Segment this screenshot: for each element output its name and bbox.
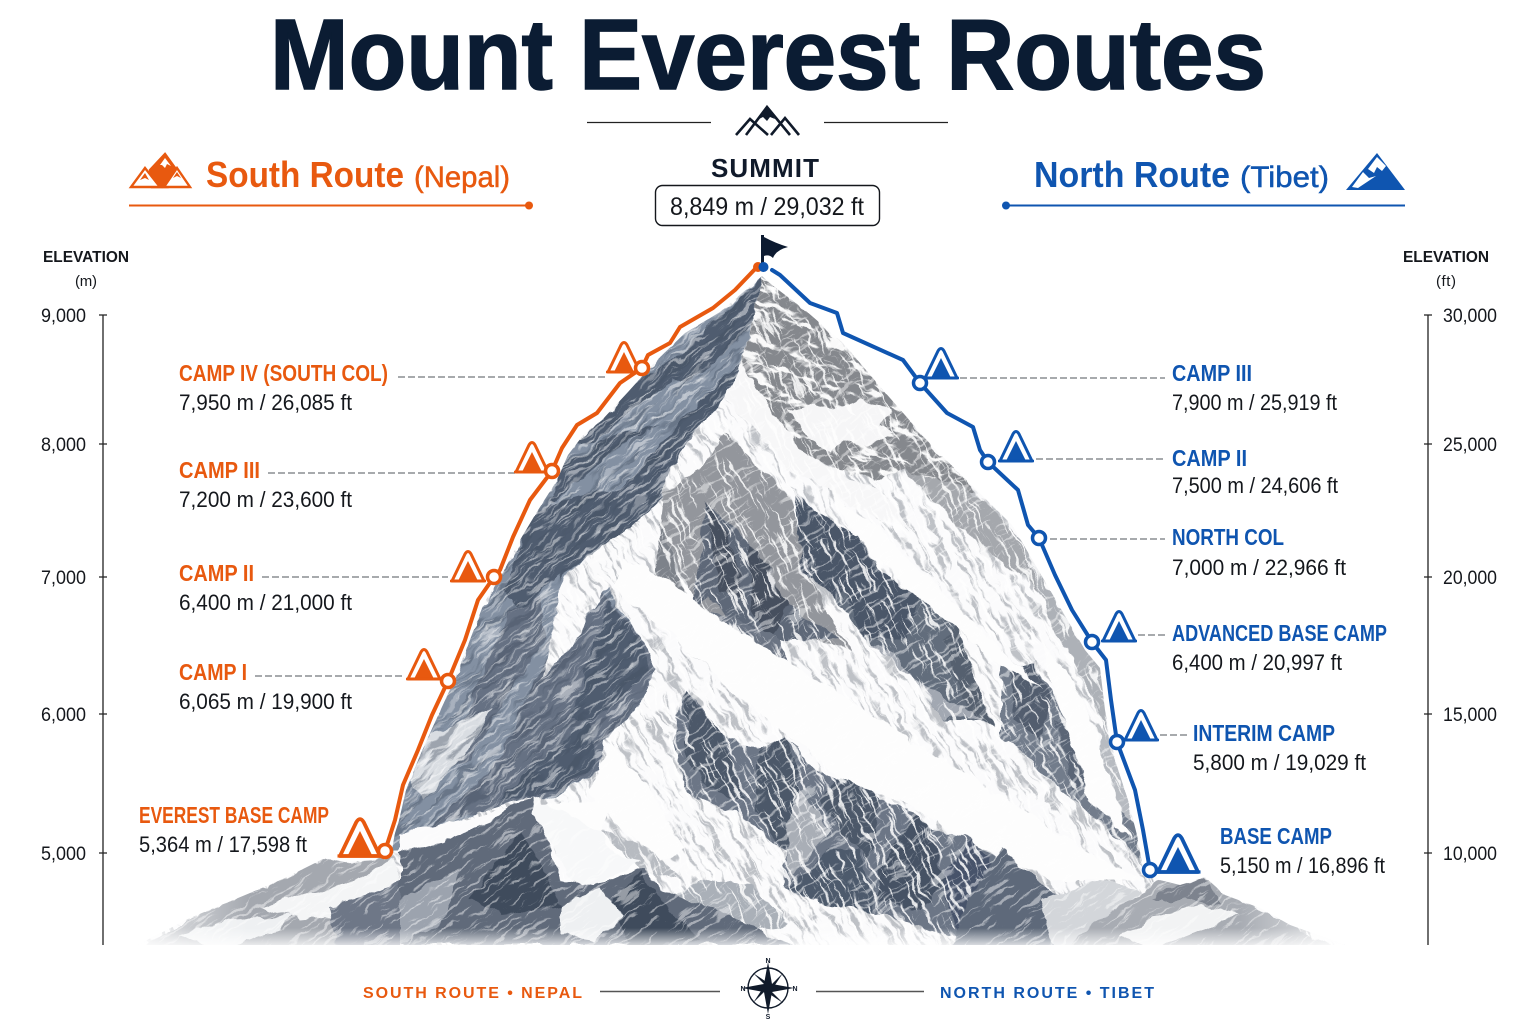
north route region: (Tibet): [1240, 161, 1329, 194]
north camp: camp II: [982, 432, 1338, 498]
south camp: camp IV: [179, 342, 648, 415]
left axis title: ELEVATION: [43, 249, 129, 266]
right elevation axis: 25,000: [1443, 435, 1497, 456]
south camp: camp III: 7,200 m / 23,600 ft: [179, 487, 352, 512]
icon: south route mountains: [131, 154, 190, 187]
upper right face: [724, 277, 1038, 592]
south camp: camp I: 6,065 m / 19,900 ft: [179, 689, 352, 714]
rock cluster B: [1001, 663, 1139, 860]
left elevation axis: 7,000: [41, 568, 86, 589]
grey slope near cluster C: [670, 880, 790, 930]
left elevation axis: 5,000: [41, 844, 86, 865]
right elevation axis: 15,000: [1443, 705, 1497, 726]
left foothills: [152, 858, 401, 945]
label: EVEREST BASE CAMP: [139, 802, 329, 828]
summit heading: SUMMIT: [711, 153, 819, 183]
label: CAMP III: [1172, 360, 1252, 386]
icon: compass: S: [766, 1014, 771, 1021]
right elevation axis: 20,000: [1443, 568, 1497, 589]
label: CAMP II: [1172, 445, 1247, 471]
face strata: [505, 276, 762, 610]
icon: compass: N: [792, 986, 798, 993]
north camp: advanced base camp: [1086, 612, 1387, 675]
north camp: camp II: 7,500 m / 24,606 ft: [1172, 473, 1338, 498]
left face fine texture: [689, 544, 830, 685]
icon: north route mountain: [1346, 153, 1405, 190]
north camp: advanced base camp: 6,400 m / 20,997 ft: [1172, 650, 1342, 675]
summit elevation: 8,849 m / 29,032 ft: [670, 193, 864, 221]
south route heading: South Route: [206, 154, 404, 195]
north camp: north col: 7,000 m / 22,966 ft: [1172, 555, 1346, 580]
left shaded face: [392, 277, 762, 851]
south route region: (Nepal): [414, 161, 510, 194]
label: BASE CAMP: [1220, 823, 1332, 849]
icon: mountain peaks: [736, 107, 799, 135]
bottom fade: [146, 929, 1334, 945]
pale lower patch: [410, 708, 492, 800]
north camp: camp III: [914, 348, 1337, 415]
summit flag and markers: [753, 235, 788, 272]
right elevation axis: 10,000: [1443, 844, 1497, 865]
icon: compass: [740, 958, 798, 1021]
label: CAMP III: [179, 457, 260, 483]
rock veins white overlay on central rock: [680, 529, 813, 662]
right edge rock band: [1012, 525, 1110, 740]
right elevation axis: 30,000: [1443, 306, 1497, 327]
right foothills: [1072, 878, 1330, 945]
south camp: everest base camp: [139, 802, 392, 858]
lower left peak: [400, 797, 790, 945]
icon: flag: [761, 235, 788, 266]
label: NORTH COL: [1172, 524, 1284, 550]
north camp: base camp: [1144, 823, 1385, 878]
dark rock cluster C: [672, 690, 1069, 943]
right elevation axis: [1403, 249, 1497, 945]
central spires: [655, 430, 850, 680]
mountain illustration: [147, 276, 1330, 945]
title ornament: divider with mountains icon: [587, 107, 948, 135]
label: CAMP II: [179, 560, 254, 586]
footer: [85, 958, 1445, 1021]
north camp: interim camp: [1110, 710, 1366, 775]
south camp: camp III: [179, 442, 558, 512]
label: INTERIM CAMP: [1193, 720, 1335, 746]
north route line: [770, 270, 1150, 870]
left elevation axis: 8,000: [41, 435, 86, 456]
fine veins over lower peaks: [688, 544, 827, 684]
south camp: everest base camp: 5,364 m / 17,598 ft: [139, 832, 307, 857]
icon: compass: N: [740, 986, 746, 993]
white wedge: [540, 584, 602, 680]
footer north label: NORTH ROUTE • TIBET: [940, 985, 1154, 1002]
summit label: [656, 153, 880, 226]
title: Mount Everest Routes: [270, 0, 1266, 111]
left elevation axis: (m): [75, 273, 97, 290]
right axis title: ELEVATION: [1403, 249, 1489, 266]
south camp: camp II: [179, 552, 500, 615]
dark rock cluster A: [793, 487, 996, 730]
south route line: [385, 267, 757, 851]
south camp: camp II: 6,400 m / 21,000 ft: [179, 590, 352, 615]
south camp: camp I: [179, 650, 454, 714]
left elevation axis: 9,000: [41, 306, 86, 327]
left elevation axis: 6,000: [41, 705, 86, 726]
south camp: camp IV: 7,950 m / 26,085 ft: [179, 390, 352, 415]
label: CAMP I: [179, 659, 247, 685]
north route header: [1002, 153, 1405, 210]
south route header: [129, 154, 533, 210]
summit elevation box: [656, 186, 880, 226]
north camp: base camp: 5,150 m / 16,896 ft: [1220, 853, 1385, 878]
label: CAMP IV (SOUTH COL): [179, 360, 388, 386]
left elevation axis: [41, 249, 129, 945]
label: ADVANCED BASE CAMP: [1172, 620, 1387, 646]
bright snow bands: [545, 493, 1143, 885]
north camp: interim camp: 5,800 m / 19,029 ft: [1193, 750, 1366, 775]
light grey streak texture on snow: [677, 528, 815, 666]
footer south label: SOUTH ROUTE • NEPAL: [363, 985, 582, 1002]
north route heading: North Route: [1034, 154, 1230, 195]
north camp: north col: [1032, 524, 1346, 580]
icon: compass: N: [765, 958, 771, 965]
north camp: camp III: 7,900 m / 25,919 ft: [1172, 390, 1337, 415]
lower right ridges: [952, 848, 1140, 945]
right elevation axis: (ft): [1436, 273, 1456, 290]
